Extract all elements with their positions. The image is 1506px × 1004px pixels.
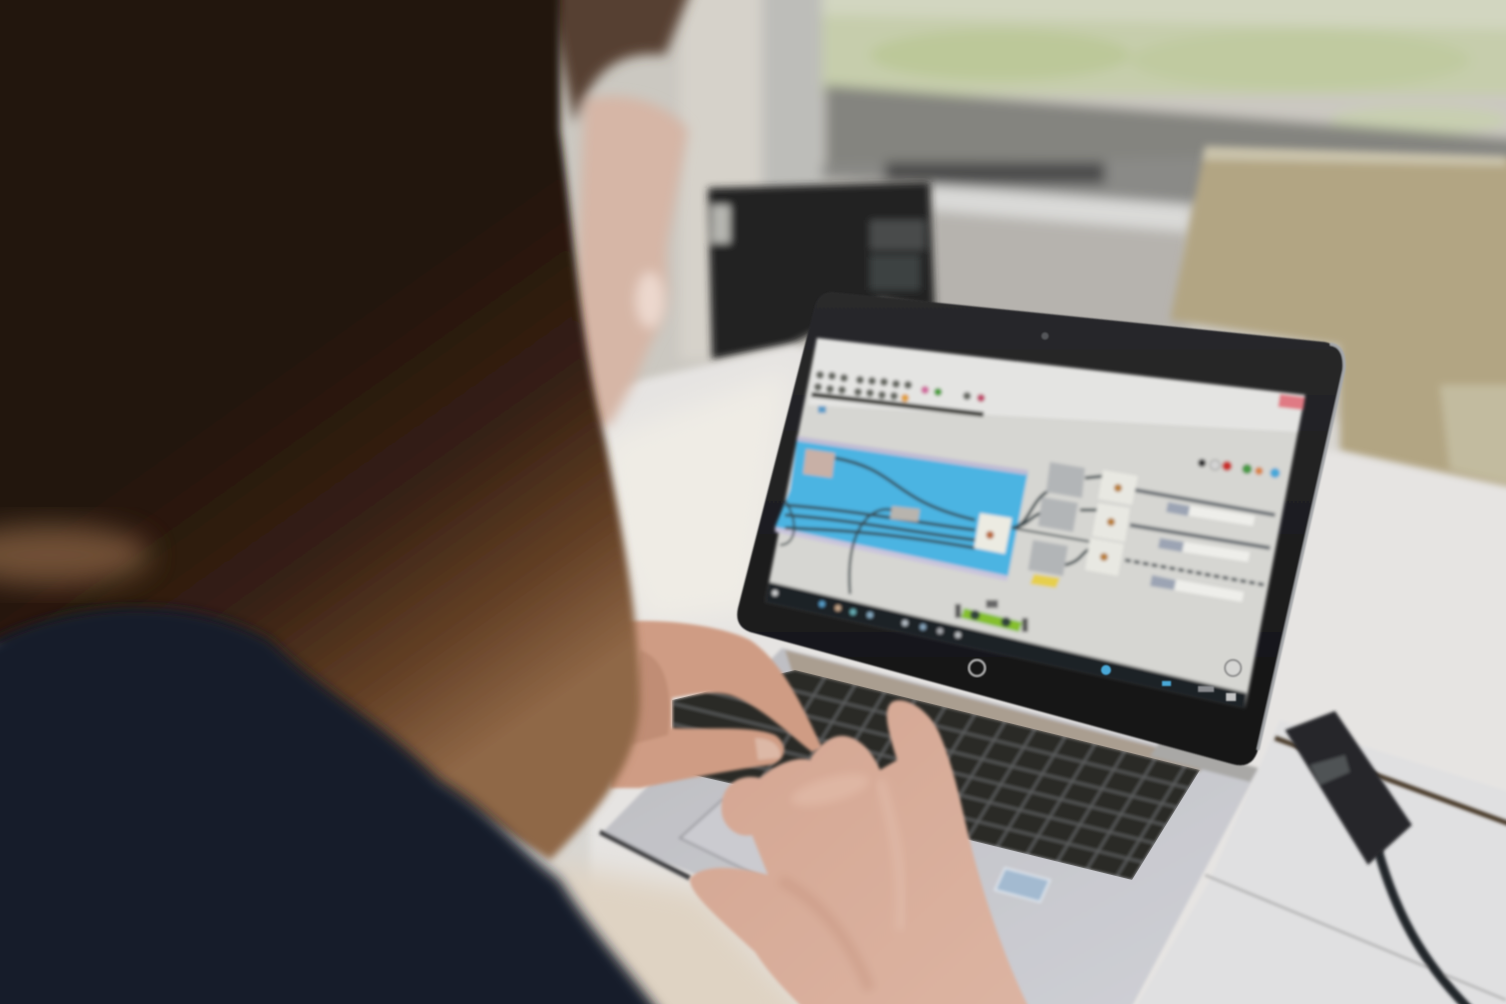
power adapter bbox=[1285, 711, 1412, 865]
background: wall and window bbox=[0, 0, 1506, 420]
navy shirt bbox=[0, 607, 680, 1004]
black cabinet bbox=[708, 182, 935, 360]
intel sticker bbox=[995, 868, 1050, 902]
laptop screen bbox=[765, 338, 1305, 708]
table bbox=[540, 345, 1506, 1004]
laptop lid bbox=[737, 292, 1344, 765]
chair bbox=[1170, 146, 1506, 500]
table seam and cable bbox=[1205, 738, 1506, 1004]
preview icons bbox=[1198, 459, 1280, 478]
right hand bbox=[690, 700, 1030, 1004]
hair bbox=[0, 0, 640, 860]
trackpad bbox=[680, 800, 790, 882]
toolbar icons bbox=[811, 371, 985, 417]
taskbar tray icons bbox=[1101, 660, 1241, 701]
blue group panel bbox=[775, 438, 1028, 576]
taskbar bbox=[765, 582, 1247, 708]
keyboard bbox=[672, 670, 1200, 880]
blurred face bbox=[545, 0, 695, 430]
green widget bbox=[955, 600, 1028, 632]
laptop base bbox=[600, 648, 1258, 1004]
hp logo bbox=[969, 660, 985, 676]
node wires bbox=[780, 458, 1275, 594]
left hand bbox=[610, 621, 822, 788]
node boxes bbox=[803, 449, 1255, 602]
window close button bbox=[1278, 394, 1305, 410]
